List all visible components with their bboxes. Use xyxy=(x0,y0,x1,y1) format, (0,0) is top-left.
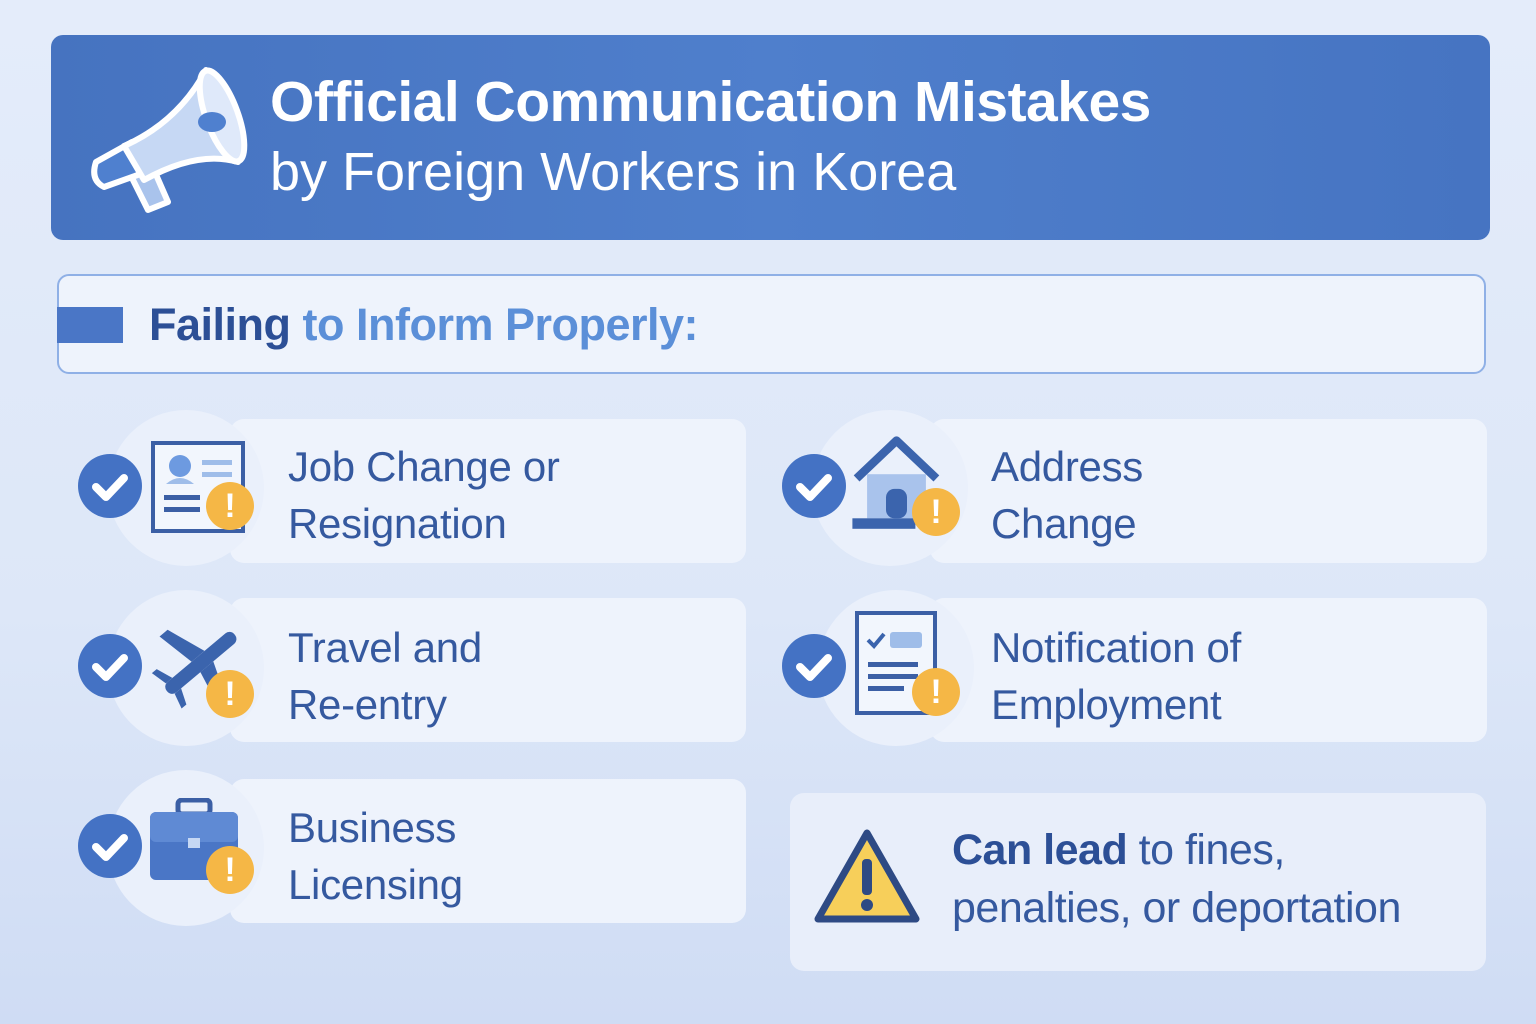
text: Resignation xyxy=(288,500,507,547)
icon: briefcase xyxy=(150,798,238,880)
item: travel xyxy=(78,590,746,746)
section heading bar xyxy=(57,274,1486,374)
item: notification: ! xyxy=(930,673,942,711)
header banner xyxy=(51,35,1490,240)
text: Re-entry xyxy=(288,681,447,728)
icon: check xyxy=(78,814,142,878)
blue tab xyxy=(57,307,123,343)
text xyxy=(288,624,482,728)
text xyxy=(991,624,1242,728)
heading text: Failing to Inform Properly: xyxy=(149,299,698,350)
text: Employment xyxy=(991,681,1221,728)
item: address: ! xyxy=(930,493,942,531)
icon: check xyxy=(78,454,142,518)
callout text: penalties, or deportation xyxy=(952,884,1401,932)
icon: resume xyxy=(151,441,245,533)
callout: consequences warning xyxy=(790,793,1486,971)
text xyxy=(288,443,560,547)
item: business xyxy=(78,770,746,926)
text: Address xyxy=(991,443,1143,490)
text: Business xyxy=(288,804,456,851)
text: Travel and xyxy=(288,624,482,671)
subtitle: by Foreign Workers in Korea xyxy=(270,142,956,202)
callout text xyxy=(952,826,1401,932)
item: notification xyxy=(782,590,1487,746)
item: address xyxy=(782,410,1487,566)
text: Change xyxy=(991,500,1136,547)
icon: check xyxy=(78,634,142,698)
icon: house xyxy=(852,436,940,529)
item: business: ! xyxy=(224,851,236,889)
text xyxy=(991,443,1143,547)
callout text: Can lead to fines, xyxy=(952,826,1285,874)
icon: megaphone xyxy=(91,67,248,213)
text: Licensing xyxy=(288,861,463,908)
text: Notification of xyxy=(991,624,1241,671)
icon: warning triangle xyxy=(814,830,920,922)
text: Job Change or xyxy=(288,443,560,490)
icon: airplane xyxy=(152,630,236,708)
item: job change: ! xyxy=(224,487,236,525)
item: travel: ! xyxy=(224,675,236,713)
icon: document xyxy=(855,611,937,715)
text xyxy=(288,804,463,908)
title: Official Communication Mistakes xyxy=(270,70,1151,134)
icon: check xyxy=(782,634,846,698)
icon: check xyxy=(782,454,846,518)
item: job change xyxy=(78,410,746,566)
